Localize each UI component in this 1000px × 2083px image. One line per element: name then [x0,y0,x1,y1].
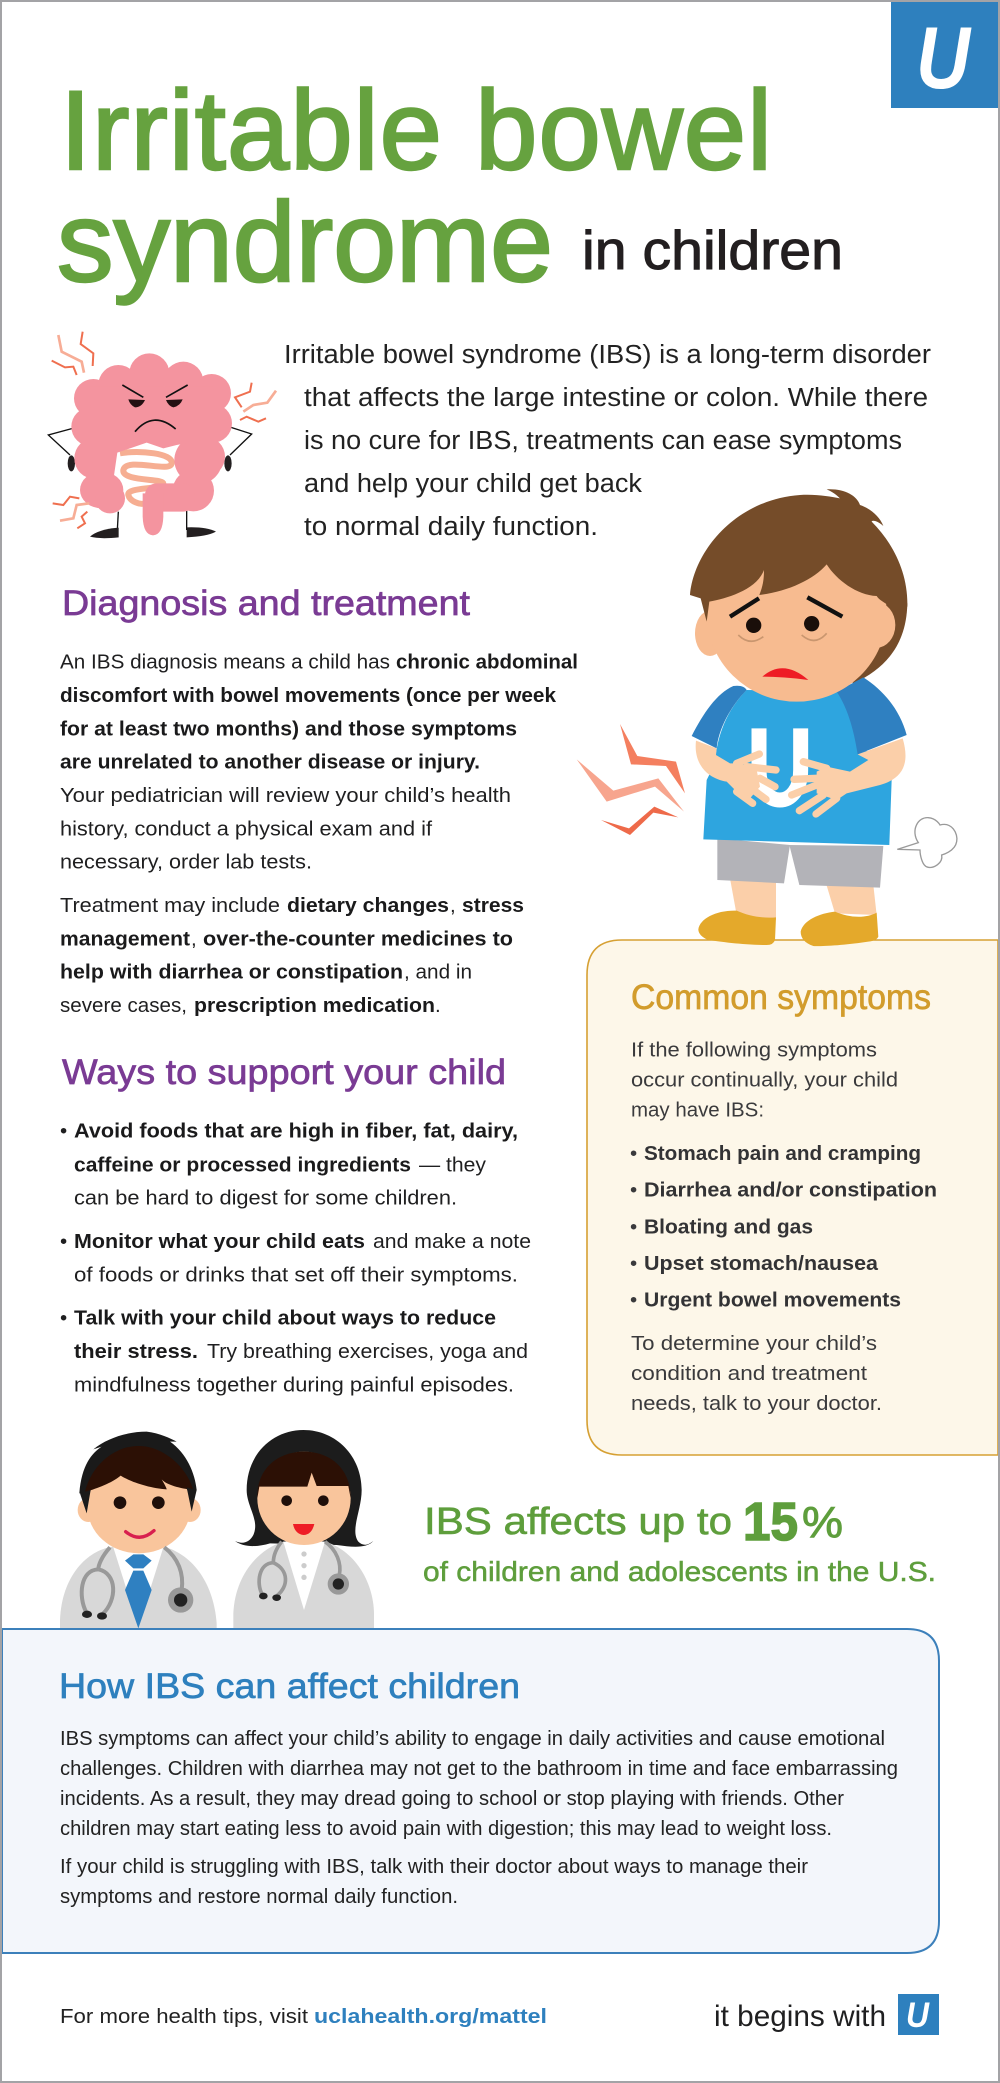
text block: support tips: caffeine or processed ingredients [74,1153,411,1176]
text block: intro: to normal daily function. [304,513,598,541]
text block: support tips: Talk with your child about ways to reduce [74,1307,496,1330]
footer: it begins with U logo: it begins with [714,2000,886,2033]
text block: diagnosis: Your pediatrician will review your child’s health [60,784,511,807]
text block: intro [284,341,932,541]
text block: support tips: • [60,1120,67,1143]
text block: symptoms closing: To determine your child’s [631,1332,877,1355]
list: symptoms: • [630,1179,637,1202]
text block: diagnosis: necessary, order lab tests. [60,851,312,874]
text block: treatment: stress [462,894,524,917]
text block: treatment [60,894,524,1017]
text block: effects: IBS symptoms can affect your child’s ability to engage in daily activities and cause emotional [60,1728,885,1750]
text block: treatment: , [191,927,197,950]
callout: IBS affects up to 15%: % [802,1498,843,1547]
text block: advice: If your child is struggling with IBS, talk with their doctor about ways to manage their [60,1856,808,1878]
text block: effects: children may start eating less to avoid pain with digestion; this may lead to weight loss. [60,1818,832,1840]
text block: symptoms intro: occur continually, your child [631,1069,898,1092]
text block: intro: that affects the large intestine or colon. While there [304,384,928,412]
text block: symptoms intro: If the following symptoms [631,1039,877,1062]
icon: sad boy holding stomach [577,489,957,946]
list: symptoms: • [630,1142,637,1165]
text block: treatment: over-the-counter medicines to [203,927,513,950]
text block: treatment: dietary changes [287,894,449,917]
text block: symptoms closing [631,1332,882,1415]
callout: IBS affects up to 15%: 15 [743,1492,798,1552]
text block: support tips: Try breathing exercises, yoga and [207,1340,528,1363]
panel: how IBS can affect children [2,1629,939,1953]
text block: advice [60,1856,808,1908]
text block: diagnosis [60,651,578,874]
heading: ways to support your child: Ways to support your child [62,1053,506,1092]
title: Irritable bowel [60,68,772,193]
text block: intro: and help your child get back [304,470,642,498]
heading: common symptoms: Common symptoms [631,978,931,1017]
title [57,68,843,305]
callout: IBS affects up to 15% [423,1492,936,1587]
title: syndrome [57,179,553,305]
list: symptoms: • [630,1215,637,1238]
text block: effects: challenges. Children with diarrhea may not get to the bathroom in time and face embarrassing [60,1758,898,1780]
text block: treatment: management [60,927,190,950]
text block: support tips: can be hard to digest for some children. [74,1187,457,1210]
icon: gas cloud [897,818,957,867]
text block: support tips: of foods or drinks that set off their symptoms. [74,1263,518,1286]
text block: advice: symptoms and restore normal daily function. [60,1886,458,1908]
list: symptoms: Upset stomach/nausea [644,1252,879,1275]
callout: IBS affects up to 15%: IBS affects up to [424,1501,732,1543]
text block: support tips [60,1120,531,1396]
list: symptoms: Urgent bowel movements [644,1289,901,1312]
heading: diagnosis and treatment: Diagnosis and treatment [62,584,470,623]
footer: website link: uclahealth.org/mattel [314,2005,547,2028]
icon: angry intestine character [48,332,276,538]
list: symptoms: • [630,1252,637,1275]
text block: intro: Irritable bowel syndrome (IBS) is a long-term disorder [284,341,932,369]
icon: male doctor [60,1432,217,1628]
list: symptoms [630,1142,937,1312]
text block: diagnosis: are unrelated to another disease or injury. [60,751,480,774]
panel: common symptoms [587,940,998,1455]
list: symptoms: Bloating and gas [644,1215,813,1238]
text block: support tips: Avoid foods that are high in fiber, fat, dairy, [74,1120,518,1143]
title: in children [582,219,843,281]
text block: support tips: — they [419,1153,487,1176]
text block: treatment: severe cases, [60,994,187,1017]
text block: symptoms closing: condition and treatment [631,1362,867,1385]
list: symptoms: Stomach pain and cramping [644,1142,921,1165]
icon: female doctor [233,1430,374,1628]
heading: how IBS can affect children: How IBS can affect children [59,1667,520,1706]
text block: symptoms closing: needs, talk to your doctor. [631,1392,882,1415]
text block: treatment: , [450,894,456,917]
text block: treatment: , and in [404,961,472,984]
text block: support tips: mindfulness together during painful episodes. [74,1373,514,1396]
footer: it begins with U logo: U [906,1996,930,2035]
icon: doctors [60,1430,374,1628]
list: symptoms: Diarrhea and/or constipation [644,1179,937,1202]
footer: website link: For more health tips, visit [60,2006,308,2028]
text block: diagnosis: discomfort with bowel movements (once per week [60,684,557,707]
text block: effects [60,1728,898,1840]
footer: it begins with U logo [714,1994,939,2035]
text block: support tips: and make a note [373,1230,531,1253]
callout: IBS affects up to 15%: of children and adolescents in the U.S. [423,1556,936,1587]
text block: symptoms intro: may have IBS: [631,1099,764,1122]
text block: support tips: • [60,1230,67,1253]
text block: support tips: their stress. [74,1340,198,1363]
logo: U badge top right: U [916,8,972,107]
text block: diagnosis: history, conduct a physical exam and if [60,817,432,840]
list: symptoms: • [630,1289,637,1312]
text block: intro: is no cure for IBS, treatments can ease symptoms [304,427,902,455]
logo: U badge top right [891,2,999,108]
text block: treatment: . [435,994,441,1017]
text block: diagnosis: An IBS diagnosis means a child has [60,651,390,674]
text block: diagnosis: for at least two months) and those symptoms [60,717,517,740]
text block: treatment: help with diarrhea or constipation [60,961,403,984]
text block: symptoms intro [631,1039,898,1122]
footer: website link [60,2005,547,2028]
text block: support tips: • [60,1307,67,1330]
text block: diagnosis: chronic abdominal [396,651,578,674]
text block: support tips: Monitor what your child eats [74,1230,365,1253]
text block: treatment: Treatment may include [60,894,280,917]
text block: treatment: prescription medication [194,994,435,1017]
text block: effects: incidents. As a result, they may dread going to school or stop playing with friends. Other [60,1788,844,1810]
icon: pain bolts [577,724,685,835]
